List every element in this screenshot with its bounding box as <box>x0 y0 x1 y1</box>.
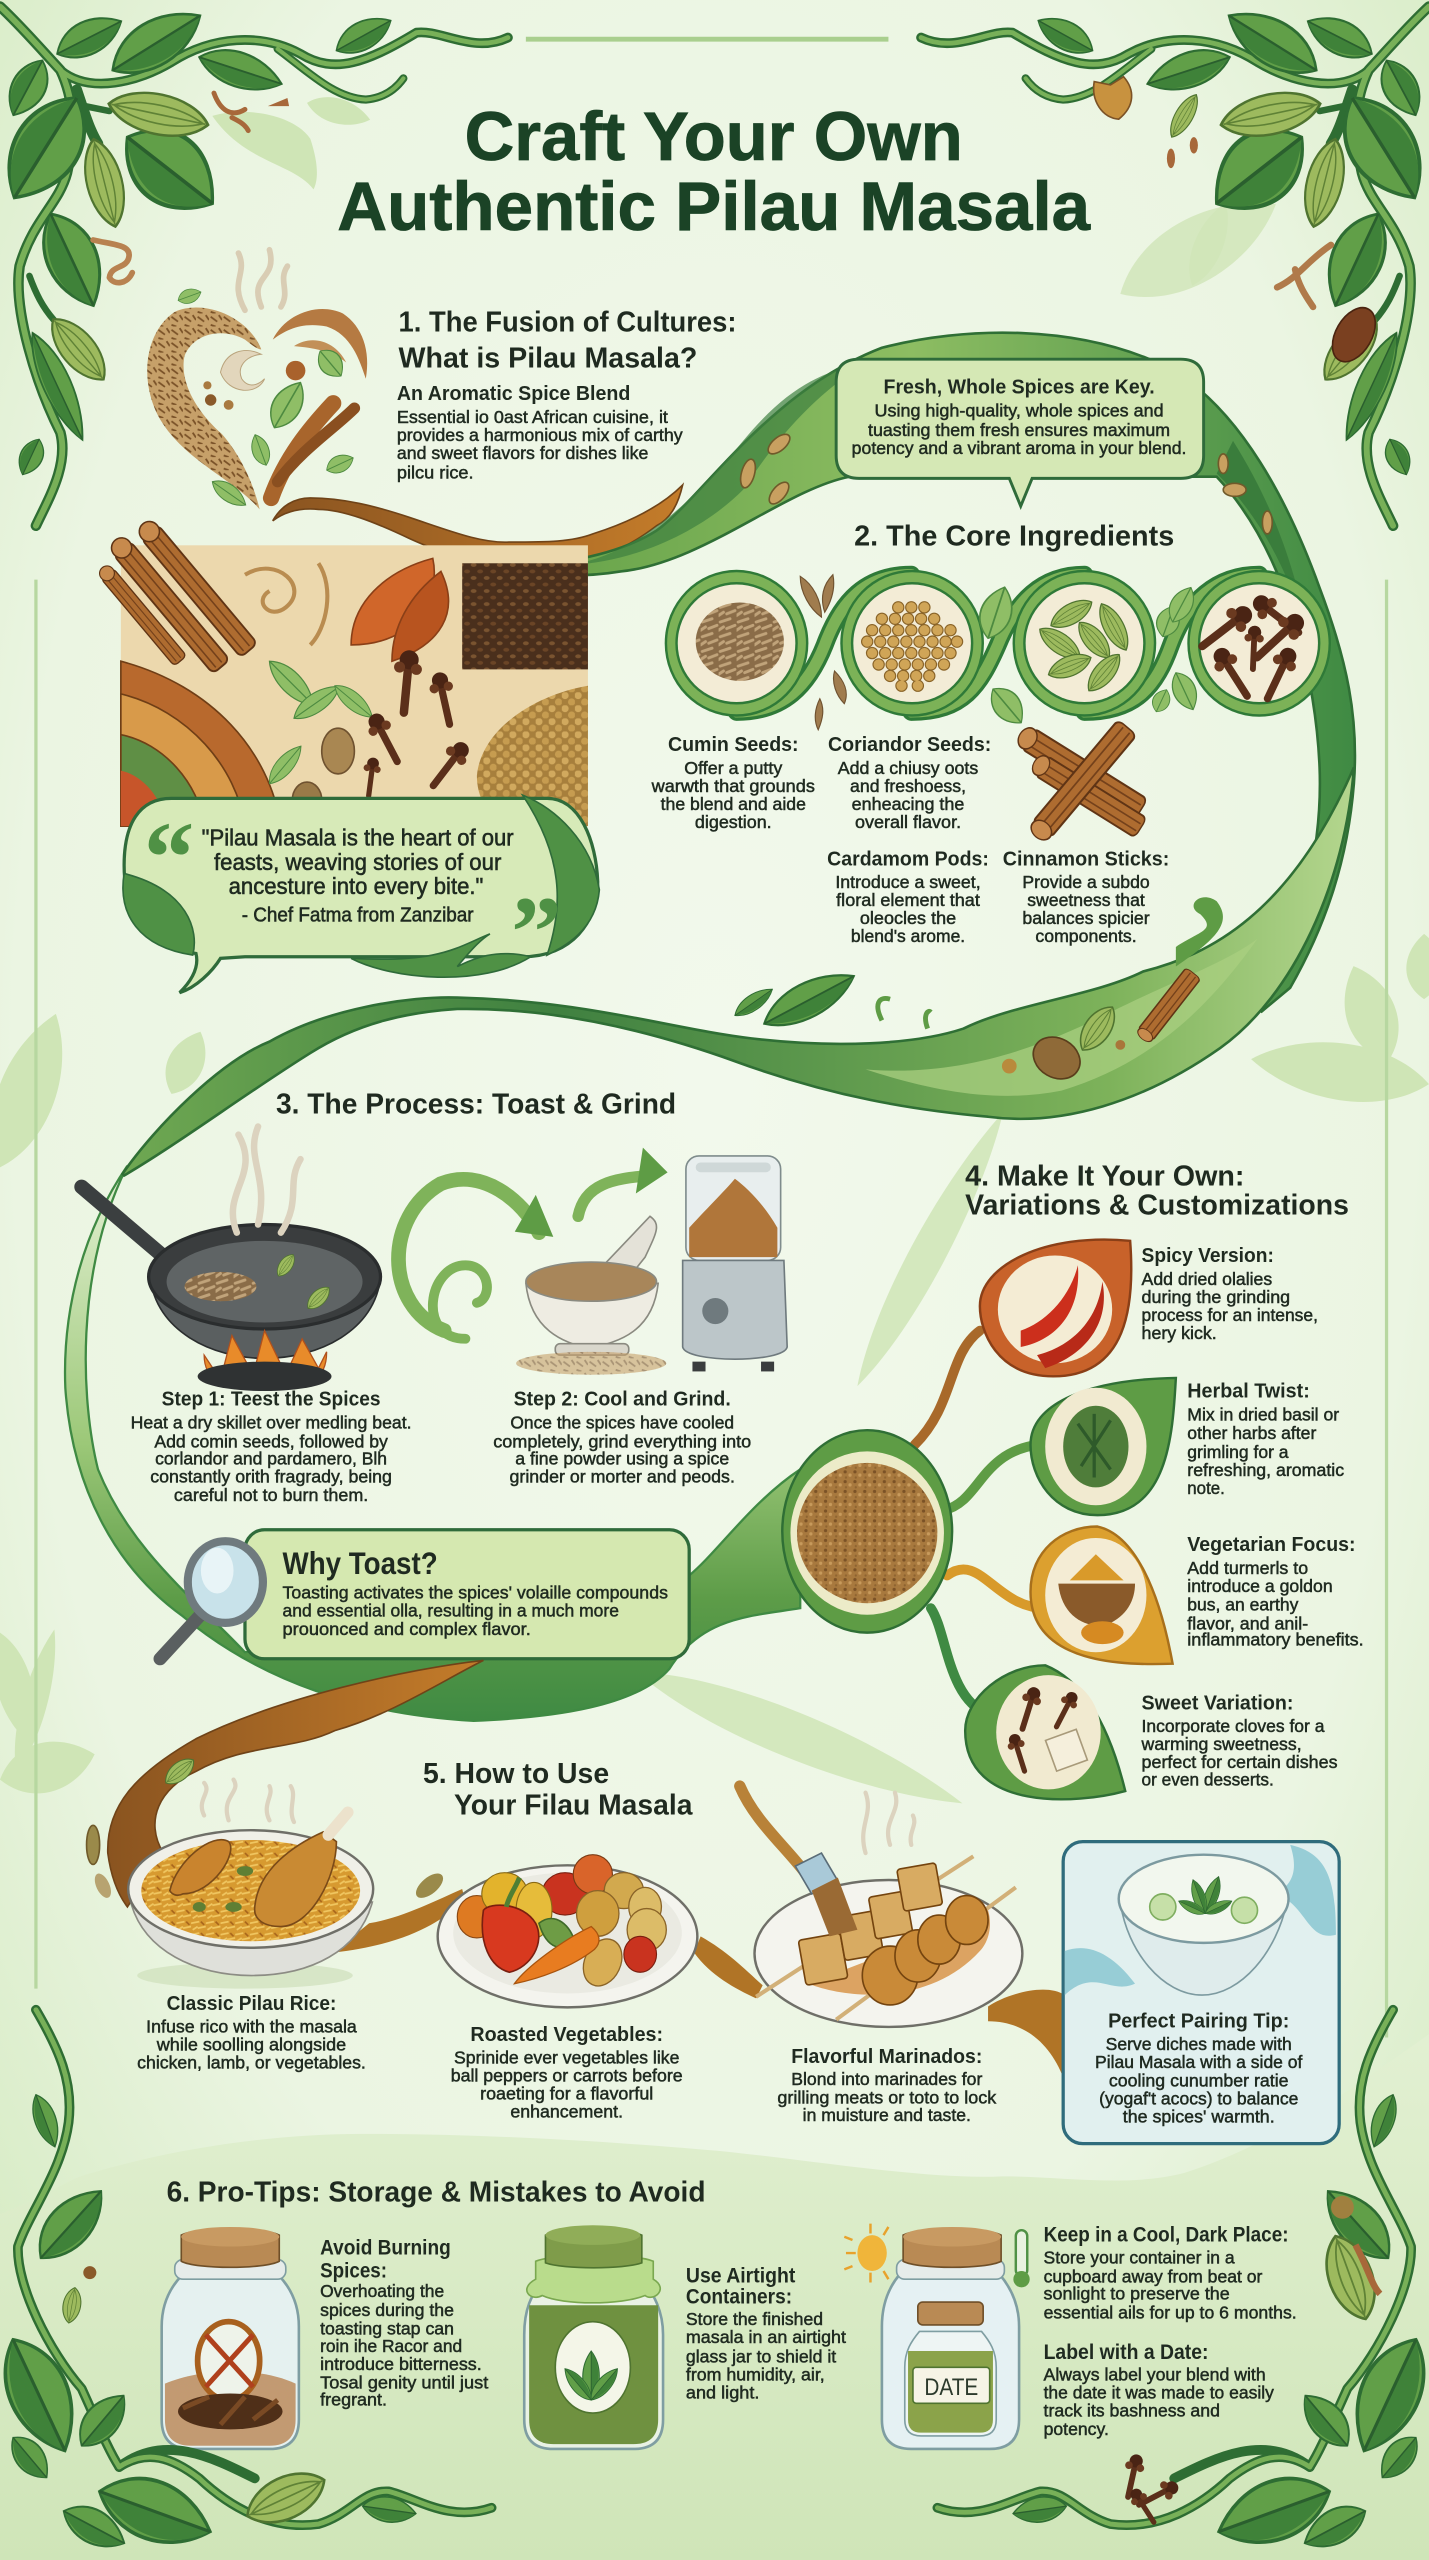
sand swirls <box>245 563 327 645</box>
branches from powder to variations <box>915 1331 1045 1714</box>
step 1 text: corlandor and pardamero, Blh <box>155 1448 387 1468</box>
text: vegetarian focus: inflammatory benefits. <box>1187 1630 1364 1650</box>
ingredient: cardamom text: blend's arome. <box>851 926 965 946</box>
ingredient medallions <box>665 570 1331 731</box>
vine: bottom right corner <box>937 2010 1429 2558</box>
text: vegetarian focus: flavor, and anil- <box>1187 1613 1308 1633</box>
flame <box>204 1331 327 1388</box>
text: roasted vegetables: Sprinide ever vegetables like <box>454 2048 679 2068</box>
text: classic pilau rice: Infuse rico with the masala <box>146 2017 357 2037</box>
heading: section 5: 5. How to Use <box>423 1758 609 1790</box>
ingredient: cumin text: Cumin Seeds: <box>668 734 799 756</box>
heading: section 1: 1. The Fusion of Cultures: <box>398 306 737 338</box>
panel: perfect pairing tip: Perfect Pairing Tip: <box>1108 2011 1289 2033</box>
callout: fresh whole spices <box>836 359 1204 506</box>
small spice sprigs near title <box>93 93 289 283</box>
callout: fresh whole spices: tuasting them fresh ensures maximum <box>868 420 1170 440</box>
step 1 text: constantly orith fragrady, being <box>150 1466 392 1486</box>
step 2 text: grinder or morter and peods. <box>510 1466 735 1486</box>
icon: roasted vegetables plate <box>438 1855 697 2007</box>
vine: top right corner <box>921 0 1429 526</box>
heading: section 5: Your Filau Masala <box>454 1790 694 1822</box>
text: avoid burning: roin ihe Racor and <box>320 2336 462 2356</box>
callout: why toast: and essential olla, resulting in a much more <box>283 1600 619 1620</box>
text: spicy version: during the grinding <box>1142 1287 1290 1307</box>
icon: central spice powder <box>782 1430 952 1633</box>
callout: chef quote: feasts, weaving stories of our <box>214 849 502 875</box>
cloves <box>388 648 424 714</box>
text: avoid burning <box>320 2237 489 2410</box>
text: avoid burning: Overhoating the <box>320 2281 444 2301</box>
icon: frying pan on flame <box>82 1127 381 1391</box>
text: spicy version: Spicy Version: <box>1142 1245 1274 1267</box>
heading: section 3: 3. The Process: Toast & Grind <box>276 1088 676 1120</box>
text: flavorful marinades <box>777 2046 997 2125</box>
ingredient: cinnamon text: Cinnamon Sticks: <box>1003 848 1169 870</box>
ingredient: coriander text: and freshoess, <box>850 776 966 796</box>
text: label with a date: potency. <box>1044 2419 1109 2439</box>
callout: why toast <box>245 1530 689 1659</box>
text: avoid burning: toasting stap can <box>320 2319 454 2339</box>
icon: skewers plate and brush <box>740 1786 1022 2027</box>
text: label with a date: Label with a Date: <box>1044 2341 1209 2364</box>
title: Authentic Pilau Masala <box>337 168 1091 245</box>
callout: fresh whole spices: Fresh, Whole Spices are Key. <box>884 376 1155 398</box>
callout: chef quote: - Chef Fatma from Zanzibar <box>242 905 474 927</box>
text: herbal twist: refreshing, aromatic <box>1187 1460 1344 1480</box>
ingredient: cardamom text: oleocles the <box>860 908 956 928</box>
step 1 text <box>131 1389 412 1505</box>
title <box>337 98 1091 245</box>
panel: perfect pairing tip: cooling cunumber ratie <box>1109 2071 1289 2091</box>
icon: thermometer <box>1013 2230 1030 2287</box>
variation: spicy chili leaf <box>980 1240 1131 1376</box>
icon: date jar <box>882 2227 1019 2449</box>
coriander field <box>477 686 588 826</box>
text: herbal twist: Herbal Twist: <box>1187 1381 1310 1403</box>
text: vegetarian focus: Vegetarian Focus: <box>1187 1534 1356 1556</box>
callout: chef quote <box>123 795 599 993</box>
text: label with a date: Always label your blend with <box>1044 2364 1266 2384</box>
step 2 text: a fine powder using a spice <box>515 1448 729 1468</box>
quote marks: “ <box>144 801 194 913</box>
ingredient: cardamom text: Introduce a sweet, <box>835 872 981 892</box>
callout: why toast: prouonced and complex flavor. <box>283 1619 531 1639</box>
callout: chef quote: ancesture into every bite." <box>229 873 483 899</box>
section 1 text: What is Pilau Masala? <box>398 342 697 374</box>
icon: sun <box>844 2224 888 2282</box>
icon: leaf label <box>555 2322 630 2413</box>
text: vegetarian focus: bus, an earthy <box>1187 1595 1299 1615</box>
text: airtight containers: glass jar to shield it <box>686 2346 836 2366</box>
text: cool dark place <box>1044 2224 1297 2322</box>
text: avoid burning: Avoid Burning <box>320 2237 451 2260</box>
text: sweet variation: warming sweetness, <box>1141 1734 1302 1754</box>
ingredient: cinnamon text <box>1003 848 1169 946</box>
panel: spice pattern illustration <box>96 517 588 826</box>
text: cool dark place: essential ails for up to 6 months. <box>1044 2302 1297 2322</box>
text: classic pilau rice: chicken, lamb, or vegetables. <box>137 2053 366 2073</box>
mandala <box>121 661 281 826</box>
orange leaves <box>351 558 434 645</box>
panel: perfect pairing tip: (yogaf't acocs) to balance <box>1099 2088 1298 2108</box>
text: airtight containers: Containers: <box>686 2286 792 2309</box>
icon: raita bowl <box>1119 1855 1289 1995</box>
section 1 text: An Aromatic Spice Blend <box>397 383 630 405</box>
connecting green wave <box>737 575 1259 712</box>
ingredient: cardamom text: floral element that <box>836 890 980 910</box>
medallion rings <box>665 570 1331 717</box>
text: flavorful marinades: Flavorful Marinados: <box>791 2046 982 2068</box>
text: avoid burning: fregrant. <box>320 2390 387 2410</box>
ingredient: cinnamon text: components. <box>1035 926 1137 946</box>
panel: perfect pairing tip: Pilau Masala with a side of <box>1095 2052 1303 2072</box>
text: avoid burning: Tosal genity until just <box>320 2373 489 2393</box>
icon: magnifying glass <box>160 1541 263 1659</box>
text: spicy version: hery kick. <box>1142 1323 1217 1343</box>
icon: cumin <box>696 602 784 681</box>
background ghost leaves <box>0 91 1429 1825</box>
vine: top left corner <box>0 0 508 526</box>
text: airtight containers: masala in an airtight <box>686 2327 846 2347</box>
icon: cardamom <box>1034 594 1135 697</box>
ribbon: big arc around process <box>65 1166 800 1721</box>
text: herbal twist: other harbs after <box>1187 1423 1317 1443</box>
variation: turmeric leaf <box>1031 1527 1173 1664</box>
text: vegetarian focus <box>1187 1534 1364 1650</box>
heading: section 6: 6. Pro-Tips: Storage & Mistakes to Avoid <box>167 2177 706 2209</box>
icon: cinnamon sticks <box>1014 720 1148 844</box>
small leaves between medallions <box>800 575 1203 731</box>
dark seeds <box>462 563 588 669</box>
text: sweet variation: Sweet Variation: <box>1142 1692 1293 1714</box>
text: cool dark place: Store your container in a <box>1044 2248 1235 2268</box>
step 1 text: Heat a dry skillet over medling beat. <box>131 1413 412 1433</box>
callout: fresh whole spices: Using high-quality, whole spices and <box>875 400 1164 420</box>
ingredient: cardamom text <box>827 848 989 946</box>
variation: cloves leaf <box>965 1665 1125 1799</box>
steam <box>233 1127 300 1233</box>
icon: jar avoid burning <box>162 2227 299 2449</box>
text: flavorful marinades: grilling meats or toto to lock <box>777 2088 997 2108</box>
text: roasted vegetables <box>451 2024 683 2122</box>
text: flavorful marinades: in muisture and taste. <box>803 2105 971 2125</box>
text: sweet variation: Incorporate cloves for a <box>1142 1716 1325 1736</box>
step 1 text: careful not to burn them. <box>174 1485 368 1505</box>
step 1 text: Add comin seeds, followed by <box>154 1431 388 1451</box>
text: airtight containers: from humidity, air, <box>686 2364 825 2384</box>
section 1 text: Essential io 0ast African cuisine, it <box>397 407 668 427</box>
text: herbal twist: note. <box>1187 1478 1225 1498</box>
ribbon: brown flow under dishes <box>87 1660 1065 2082</box>
callout: why toast: Toasting activates the spices' volaille compounds <box>283 1582 668 1602</box>
ingredient: cumin text: the blend and aide <box>661 794 806 814</box>
text: herbal twist: Mix in dried basil or <box>1187 1404 1339 1424</box>
step 2 text: Once the spices have cooled <box>510 1413 734 1433</box>
icon: coriander <box>867 607 957 686</box>
ingredient: coriander text: Coriandor Seeds: <box>828 734 991 756</box>
ingredient: cumin text: Offer a putty <box>684 758 783 778</box>
text: airtight containers: Use Airtight <box>686 2264 795 2287</box>
ingredient: cumin text: warwth that grounds <box>651 776 815 796</box>
text: spicy version <box>1142 1245 1318 1343</box>
heading: section 4 <box>965 1160 1349 1222</box>
panel: perfect pairing tip <box>1063 1842 1339 2144</box>
ingredient: cinnamon text: balances spicier <box>1022 908 1150 928</box>
text: roasted vegetables: roaeting for a flavorful <box>480 2084 653 2104</box>
ingredient: cumin text <box>651 734 815 832</box>
text: airtight containers <box>686 2264 846 2402</box>
panel: perfect pairing tip: the spices' warmth. <box>1123 2106 1275 2126</box>
heading: section 5 <box>423 1758 694 1822</box>
ingredient: cardamom text: Cardamom Pods: <box>827 848 989 870</box>
heading: section 4: 4. Make It Your Own: <box>965 1160 1244 1192</box>
section 1 text <box>397 306 737 482</box>
icon: no burning symbol <box>198 2322 260 2400</box>
text: label with a date: the date it was made to easily <box>1044 2382 1274 2402</box>
ingredient: cinnamon text: Provide a subdo <box>1022 872 1150 892</box>
text: herbal twist <box>1187 1381 1344 1498</box>
cinnamon sticks <box>96 517 257 674</box>
icon: mortar and pestle <box>516 1216 666 1375</box>
heading: section 2: 2. The Core Ingredients <box>854 520 1174 552</box>
callout: chef quote: "Pilau Masala is the heart of our <box>202 825 514 851</box>
callout: chef quote: ” <box>511 877 562 989</box>
text: classic pilau rice: while soolling alongside <box>156 2035 346 2055</box>
text: cool dark place: cupboard away from beat or <box>1044 2266 1263 2286</box>
text: airtight containers: Store the finished <box>686 2309 823 2329</box>
text: spicy version: Add dried olalies <box>1142 1269 1273 1289</box>
step 2 text: Step 2: Cool and Grind. <box>514 1389 731 1411</box>
text: vegetarian focus: introduce a goldon <box>1187 1576 1333 1596</box>
callout: fresh whole spices: potency and a vibrant aroma in your blend. <box>852 438 1186 458</box>
text: vegetarian focus: Add turmerls to <box>1187 1558 1308 1578</box>
title: Craft Your Own <box>465 98 963 175</box>
text: classic pilau rice: Classic Pilau Rice: <box>167 1993 336 2015</box>
text: spicy version: process for an intense, <box>1142 1305 1318 1325</box>
icon: spiral arrows <box>398 1149 666 1339</box>
text: classic pilau rice <box>137 1993 366 2073</box>
text: cool dark place: Keep in a Cool, Dark Place: <box>1044 2224 1289 2247</box>
text: avoid burning: Spices: <box>320 2260 387 2283</box>
ingredient: cinnamon text: sweetness that <box>1027 890 1145 910</box>
text: roasted vegetables: ball peppers or carrots before <box>451 2066 683 2086</box>
ribbon: brown spice swoosh <box>273 485 683 567</box>
step 2 text: completely, grind everything into <box>493 1431 751 1451</box>
text: roasted vegetables: enhancement. <box>510 2102 623 2122</box>
section 1 text: and sweet flavors for dishes like <box>397 443 648 463</box>
ingredient: coriander text: overall flavor. <box>855 812 961 832</box>
green leaves <box>262 654 321 712</box>
panel: perfect pairing tip: Serve diches made with <box>1106 2034 1292 2054</box>
icon: airtight green jar <box>524 2225 663 2449</box>
text: sweet variation: or even desserts. <box>1142 1769 1274 1789</box>
icon: spice grinder <box>683 1156 787 1371</box>
step 2 text <box>493 1389 751 1486</box>
text: sweet variation <box>1141 1692 1338 1789</box>
step 1 text: Step 1: Teest the Spices <box>162 1389 381 1411</box>
text: label with a date <box>1044 2341 1274 2439</box>
section 1 text: provides a harmonious mix of carthy <box>397 425 683 445</box>
text: flavorful marinades: Blond into marinades for <box>791 2069 983 2089</box>
callout: why toast: Why Toast? <box>283 1546 438 1581</box>
heading: section 4: Variations & Customizations <box>965 1190 1349 1222</box>
ingredient: coriander text <box>828 734 991 832</box>
ingredient: cumin text: digestion. <box>695 812 772 832</box>
text: cool dark place: sonlight to preserve the <box>1044 2284 1230 2304</box>
lower section wavy background <box>0 2034 1429 2560</box>
text: sweet variation: perfect for certain dishes <box>1142 1752 1338 1772</box>
section 1 text: pilcu rice. <box>397 462 474 482</box>
ingredient: coriander text: Add a chiusy oots <box>838 758 979 778</box>
text: avoid burning: introduce bitterness. <box>320 2354 482 2374</box>
vine: bottom left corner <box>0 2010 492 2558</box>
text: avoid burning: spices during the <box>320 2300 454 2320</box>
ribbon: lower right sweep with spices <box>122 767 1354 1176</box>
text: airtight containers: and light. <box>686 2382 759 2402</box>
icon: pilau rice bowl <box>128 1780 373 1989</box>
variation: herbal leaf <box>1031 1378 1176 1515</box>
text: roasted vegetables: Roasted Vegetables: <box>470 2024 663 2046</box>
icon: date jar: DATE <box>924 2374 978 2401</box>
icon: cloves <box>1193 589 1311 704</box>
text: label with a date: track its bashness and <box>1044 2400 1220 2420</box>
ingredient: coriander text: enheacing the <box>852 794 964 814</box>
icon: spice heart <box>147 250 367 512</box>
ribbon: top green arch <box>470 333 1355 1012</box>
text: herbal twist: grimling for a <box>1187 1442 1289 1462</box>
